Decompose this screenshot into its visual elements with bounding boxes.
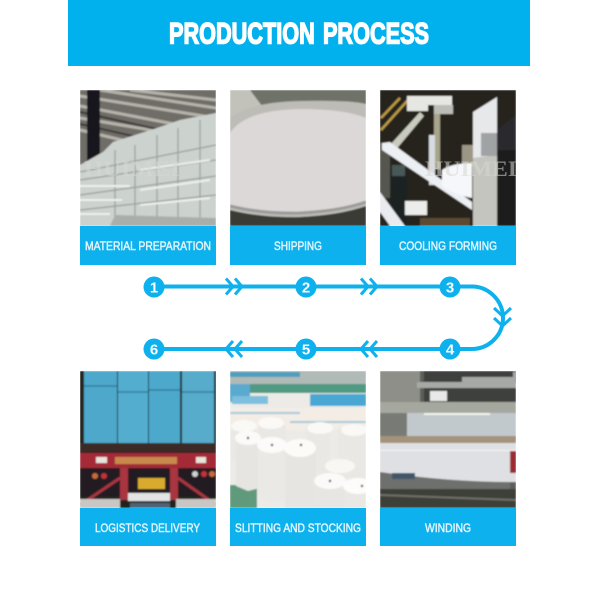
caption bar <box>80 226 216 265</box>
photo: winding machine <box>380 371 516 508</box>
step 6: 6 <box>150 342 158 358</box>
photo: stacked white bags in warehouse <box>80 90 216 226</box>
flow line <box>154 286 503 349</box>
panel: material preparation <box>80 90 216 265</box>
step 5 <box>296 338 316 360</box>
step 3: 3 <box>446 280 454 296</box>
step 2: 2 <box>302 280 310 296</box>
caption: LOGISTICS DELIVERY <box>95 523 200 535</box>
step 5: 5 <box>302 342 310 358</box>
arrow: 2 to 3 <box>361 278 377 294</box>
caption bar <box>380 508 516 546</box>
step 1: 1 <box>150 280 158 296</box>
step 2 <box>296 276 316 298</box>
arrow: 3 to 4 <box>494 308 511 326</box>
panel: logistics delivery <box>80 371 216 546</box>
photo: white powder in steel bowl <box>230 90 366 226</box>
watermark: HUIMEI <box>425 156 517 181</box>
panel: shipping <box>230 90 366 265</box>
title: PRODUCTION PROCESS <box>169 17 429 50</box>
watermark: HUIMEI <box>84 156 180 181</box>
step 4: 4 <box>446 342 455 358</box>
caption bar <box>380 226 516 265</box>
photo: truck with blue rolls <box>80 371 216 508</box>
caption bar <box>230 226 366 265</box>
caption bar <box>80 508 216 546</box>
step 1 <box>144 276 164 298</box>
caption: SHIPPING <box>274 241 322 253</box>
step 3 <box>440 276 460 298</box>
arrow: 5 to 6 <box>226 341 242 357</box>
caption: COOLING FORMING <box>399 241 497 253</box>
caption: MATERIAL PREPARATION <box>85 241 211 253</box>
panel: slitting and stocking <box>230 371 373 546</box>
photo: white fabric rolls in stock <box>230 371 373 508</box>
panel: winding <box>380 371 516 546</box>
panel: cooling forming <box>380 90 517 265</box>
step 6 <box>144 338 164 360</box>
photo: forming machine with white fabric <box>380 90 517 226</box>
arrow: 4 to 5 <box>361 341 377 357</box>
process flow arrow <box>144 276 511 360</box>
arrow: 1 to 2 <box>226 278 242 294</box>
title banner <box>68 0 530 66</box>
caption bar <box>230 508 366 546</box>
caption: SLITTING AND STOCKING <box>235 523 361 535</box>
caption: WINDING <box>425 523 471 535</box>
step 4 <box>440 338 460 360</box>
